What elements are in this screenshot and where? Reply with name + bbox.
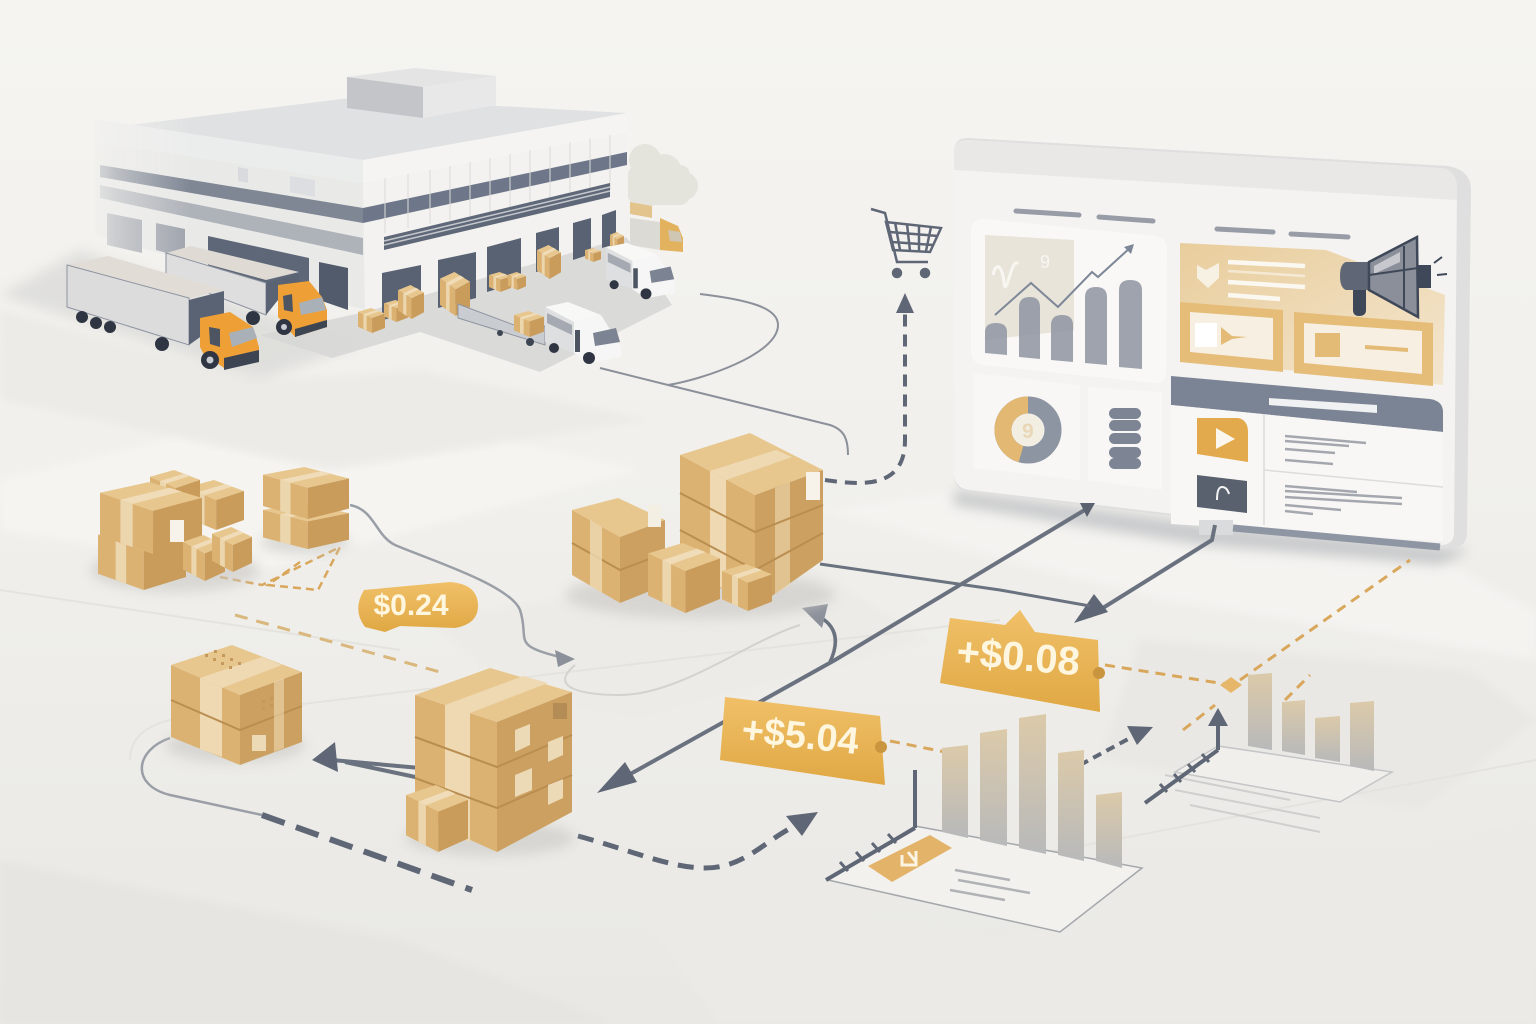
header dashes bbox=[1016, 211, 1348, 237]
ground map patches bbox=[0, 310, 1536, 1024]
long arrow to dashboard bbox=[597, 503, 1095, 793]
white van rear bbox=[606, 243, 675, 299]
panel: line and bar chart: 9 bbox=[1040, 252, 1050, 272]
flatbed trailer bbox=[458, 304, 545, 346]
far delivery truck bbox=[630, 202, 683, 252]
box cluster: pair bbox=[260, 467, 350, 554]
warehouse shadow bbox=[0, 250, 360, 380]
ad card two bbox=[1294, 312, 1433, 386]
tan dashed triangle marker bbox=[220, 547, 340, 590]
arrow to left box stack bbox=[312, 742, 420, 778]
ad text lines bbox=[1228, 262, 1305, 299]
tall stacked pallet bbox=[680, 433, 823, 608]
panel: table bbox=[1171, 376, 1443, 541]
roof penthouse bbox=[347, 68, 496, 118]
price tag: +$0.08 bbox=[940, 610, 1105, 712]
chart flag marker bbox=[868, 835, 952, 882]
icon: return arrow button bbox=[1197, 475, 1247, 513]
warehouse building masked fade bbox=[95, 98, 627, 310]
tan dashed connectors bbox=[890, 560, 1410, 752]
title bar bbox=[954, 140, 1457, 200]
icon: megaphone bbox=[1340, 237, 1447, 317]
ad card one bbox=[1180, 302, 1283, 372]
table rows text lines bbox=[1285, 436, 1402, 514]
price tag: $0.24 bbox=[358, 582, 478, 632]
warehouse bbox=[0, 68, 698, 380]
route: warehouse to central stack bbox=[600, 294, 848, 455]
warehouse ground pad bbox=[260, 235, 672, 372]
box cluster: lower left bbox=[165, 645, 305, 765]
dashed arrow between charts bbox=[1080, 726, 1153, 765]
arrow from dashboard stand bbox=[1074, 525, 1215, 623]
panel: list bbox=[1088, 387, 1162, 490]
chart base panel bbox=[828, 826, 1142, 932]
bars bbox=[942, 714, 1122, 868]
dashboard shadow bbox=[954, 490, 1470, 565]
icon: play button bbox=[1197, 418, 1248, 462]
white van front bbox=[545, 302, 621, 364]
price tag: $0.24: $0.24 bbox=[373, 589, 449, 622]
bar chart: large bbox=[826, 714, 1142, 932]
dock boxes bbox=[358, 232, 624, 333]
bar chart: small bbox=[1145, 673, 1392, 832]
loop route with dark dashes bbox=[142, 738, 472, 890]
price tag: +$5.04: +$5.04 bbox=[740, 709, 861, 763]
box cluster: left group bbox=[90, 470, 260, 592]
ad heart icon bbox=[1197, 263, 1219, 288]
truck: orange cab rear bbox=[166, 246, 327, 337]
truck: orange cab front bbox=[67, 256, 259, 370]
route: central stack to tag bbox=[820, 564, 1090, 606]
panel: line and bar chart bbox=[971, 219, 1167, 383]
window frame bbox=[954, 138, 1471, 548]
tan dashed route bbox=[235, 615, 440, 672]
price tag: +$0.08: +$0.08 bbox=[955, 630, 1082, 684]
trees behind warehouse bbox=[628, 144, 698, 206]
box cluster: lower centre stack bbox=[405, 668, 575, 856]
two-tier left pallet bbox=[572, 498, 665, 603]
dashboard window bbox=[954, 138, 1471, 565]
panel: donut chart: 9 bbox=[1022, 420, 1034, 443]
connector diamond marker bbox=[1220, 677, 1242, 693]
dashed arrow to cart bbox=[825, 293, 914, 483]
roof bbox=[130, 98, 627, 160]
panel: ad creative bbox=[1180, 243, 1445, 386]
panel: donut chart bbox=[973, 373, 1080, 480]
box cluster: central stack bbox=[565, 433, 835, 619]
price tag: +$5.04 bbox=[720, 697, 887, 785]
left facade bbox=[154, 152, 365, 310]
icon: shopping cart bbox=[871, 209, 941, 277]
curved arrow from long arrow bbox=[802, 604, 835, 662]
route: left boxes to central bbox=[350, 505, 800, 695]
dashed arrow to bar chart bbox=[578, 812, 818, 868]
right facade bbox=[363, 113, 627, 183]
loading doors bbox=[382, 210, 616, 320]
dashboard stand bbox=[1199, 520, 1233, 535]
